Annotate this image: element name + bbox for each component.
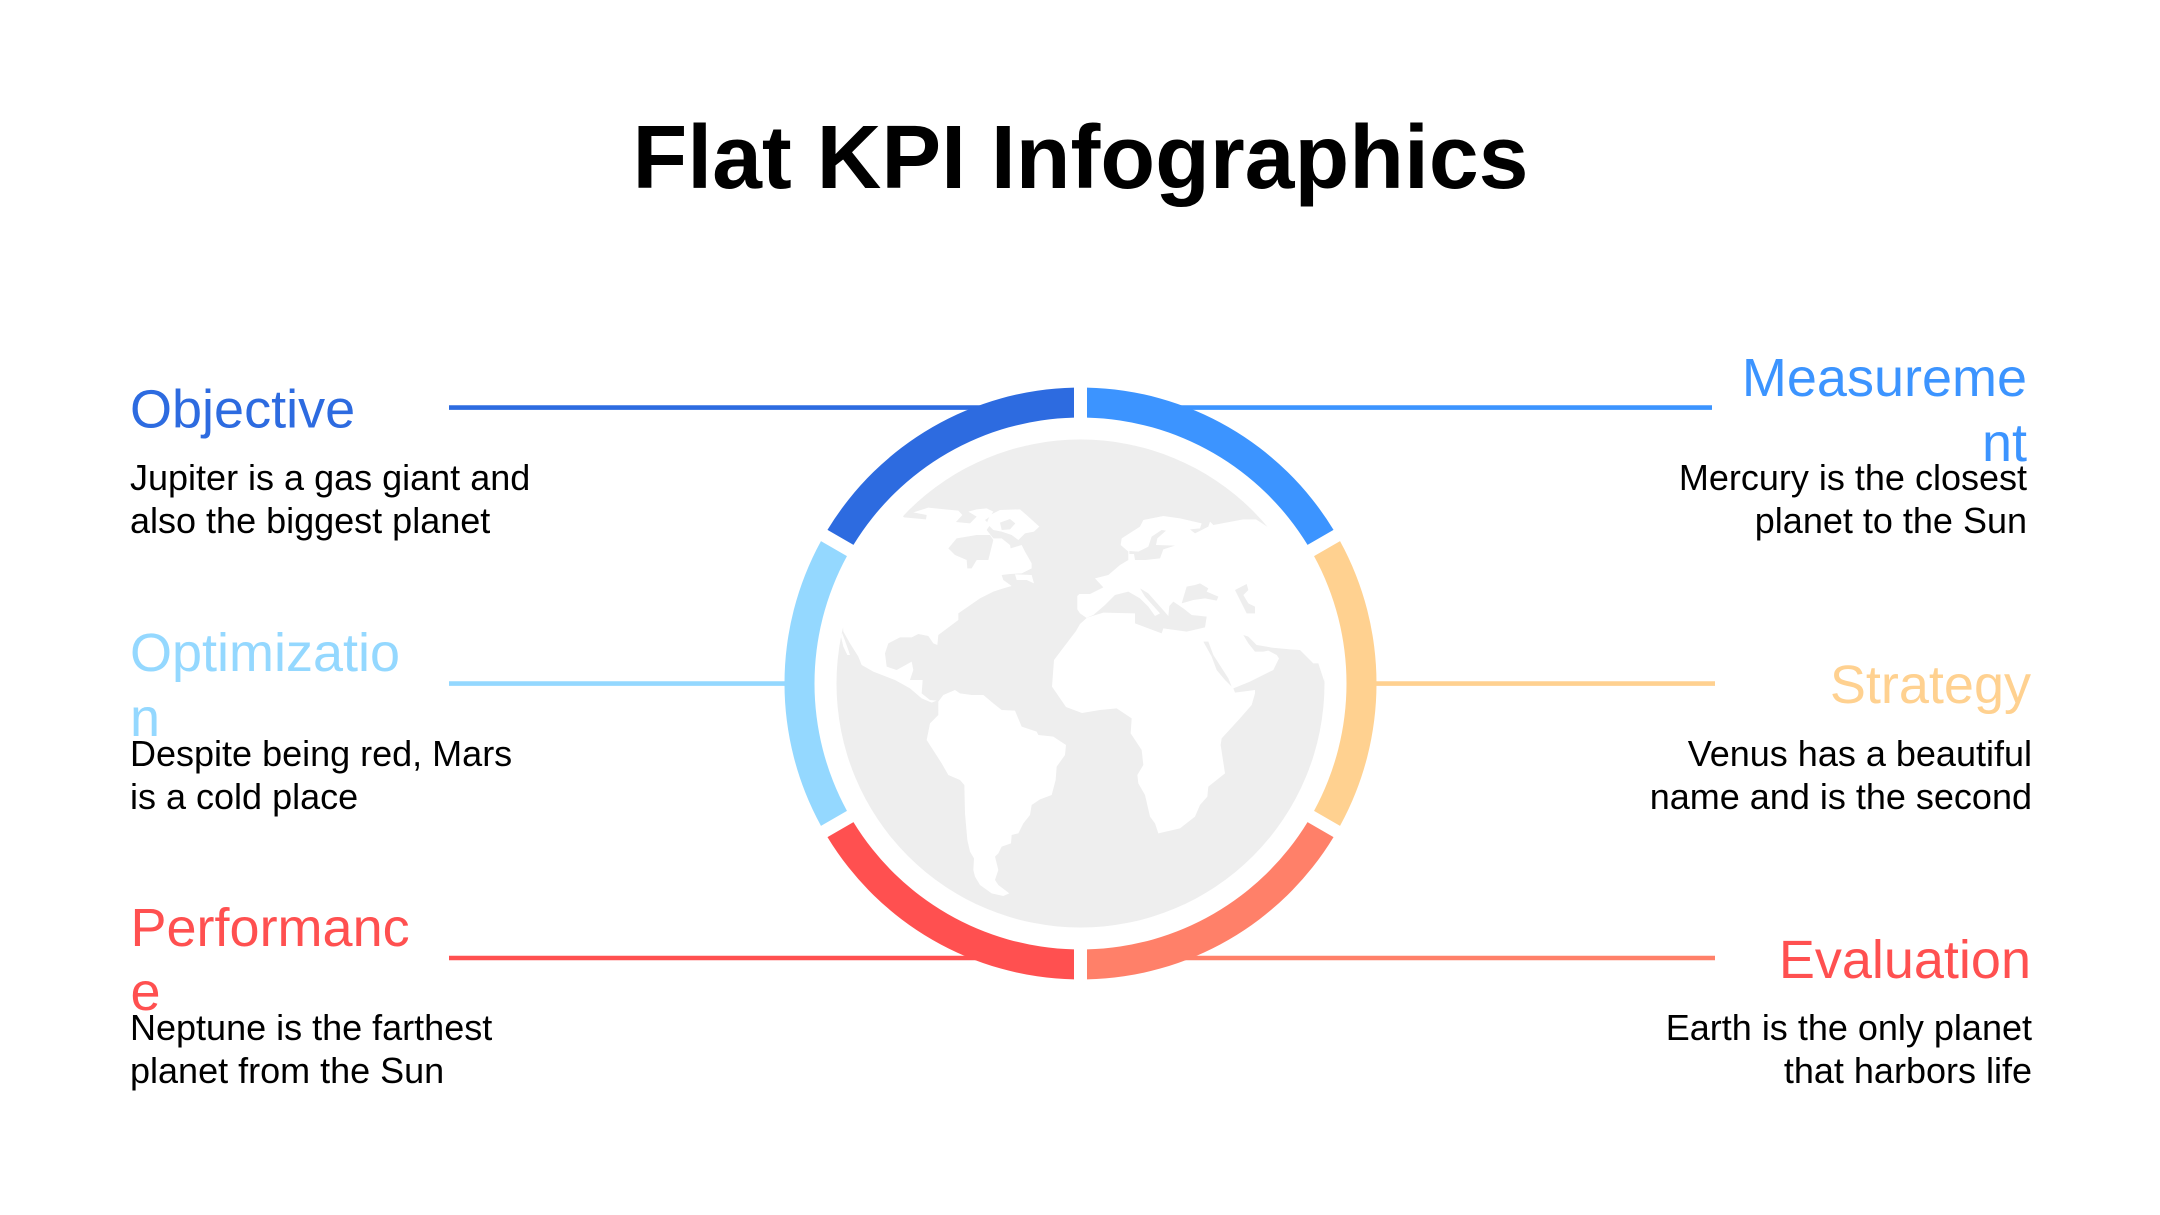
heading: performance: e [130, 962, 161, 1022]
segment: objective [827, 388, 1074, 545]
panel: objective [130, 380, 530, 541]
text: measurement: planet to the Sun [1755, 500, 2027, 541]
text: optimization: Despite being red, Mars [130, 733, 512, 774]
panel: performance [130, 898, 492, 1091]
heading: optimization: n [130, 688, 160, 748]
segment: evaluation [1087, 822, 1334, 979]
connector lines [449, 408, 1715, 958]
text: evaluation: that harbors life [1784, 1050, 2032, 1091]
segment: strategy [1314, 541, 1377, 826]
Baffin Island [987, 509, 1039, 540]
heading: measurement: Measureme [1742, 348, 2027, 408]
Foxe Basin [1000, 519, 1015, 530]
heading: objective: Objective [130, 380, 355, 440]
panel: measurement [1679, 348, 2027, 541]
globe disc [836, 440, 1324, 928]
segment: performance [827, 822, 1074, 979]
segment: optimization [784, 541, 847, 826]
panel: optimization [130, 623, 512, 817]
text: evaluation: Earth is the only planet [1666, 1007, 2032, 1048]
Baja California [841, 633, 850, 655]
Caspian Sea [1235, 584, 1255, 613]
text: measurement: Mercury is the closest [1679, 457, 2027, 498]
heading: measurement: nt [1982, 413, 2027, 473]
title: Flat KPI Infographics [632, 107, 1529, 207]
heading: evaluation: Evaluation [1779, 930, 2031, 990]
text: strategy: Venus has a beautiful [1688, 733, 2032, 774]
heading: performance: Performanc [130, 898, 410, 958]
panel: evaluation [1666, 930, 2032, 1091]
heading: optimization: Optimizatio [130, 623, 400, 683]
Baltic Sea [1129, 530, 1175, 560]
Red Sea [1203, 642, 1232, 687]
text: objective: also the biggest planet [130, 500, 490, 541]
ring segments [784, 388, 1377, 979]
Black Sea [1182, 583, 1218, 603]
segment: measurement [1087, 388, 1334, 545]
Mediterranean Sea [1086, 588, 1207, 633]
Newfoundland [1015, 574, 1034, 583]
globe [836, 440, 1325, 928]
text: performance: planet from the Sun [130, 1050, 444, 1091]
North America [840, 508, 1039, 680]
text: objective: Jupiter is a gas giant and [130, 457, 530, 498]
text: performance: Neptune is the farthest [130, 1007, 492, 1048]
text: optimization: is a cold place [130, 776, 358, 817]
panel: strategy [1650, 655, 2032, 817]
Central and South America [895, 680, 1066, 896]
Eurasia and Africa [1052, 516, 1325, 833]
Hudson Bay [948, 535, 993, 568]
heading: strategy: Strategy [1830, 655, 2031, 715]
text: strategy: name and is the second [1650, 776, 2032, 817]
